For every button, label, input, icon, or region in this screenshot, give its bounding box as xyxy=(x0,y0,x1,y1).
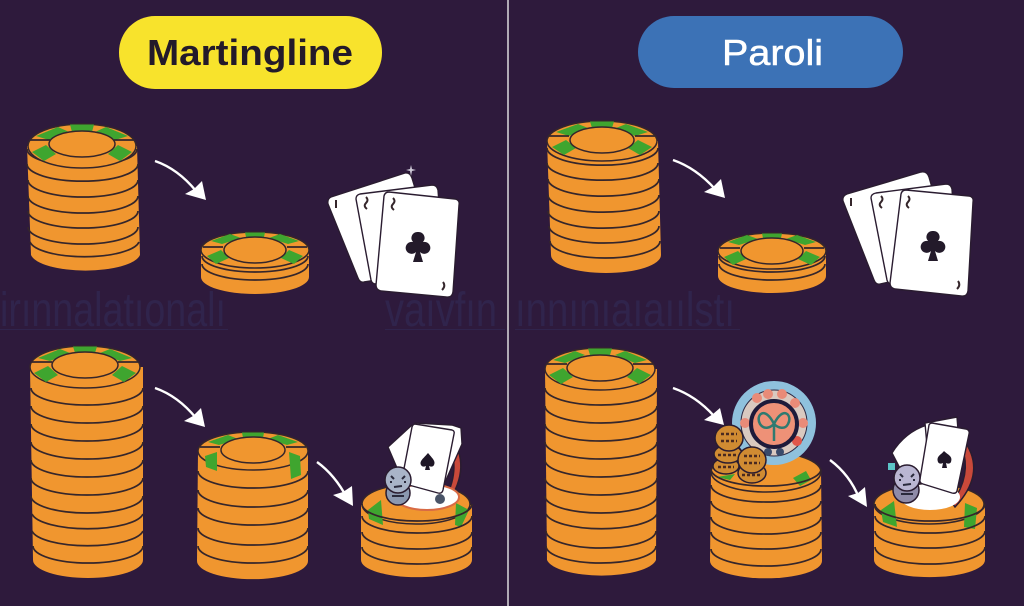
chip stack: Paroli bottom short xyxy=(874,484,985,577)
playing cards: Paroli top xyxy=(843,172,973,296)
arrow 5 xyxy=(673,388,724,425)
playing cards with chips: Paroli bottom xyxy=(888,417,974,510)
arrow 1 xyxy=(155,161,206,200)
chip stack: Martingline top small xyxy=(201,232,309,294)
arrow 6 xyxy=(830,460,867,507)
heading: Paroli xyxy=(638,16,903,88)
icon: brown chip piles xyxy=(713,425,766,483)
arrow 3 xyxy=(155,388,205,427)
heading: Paroli: Paroli xyxy=(722,32,823,73)
chip stack: Paroli top tall xyxy=(547,121,661,273)
faint background text left: irınnalatıonalı xyxy=(0,284,226,337)
chip stack: Paroli top small xyxy=(718,233,826,293)
chip stack: Martingline bottom short xyxy=(361,484,472,577)
chip stack: Paroli bottom medium xyxy=(710,452,822,578)
playing cards with chips: Martingline bottom xyxy=(385,423,462,510)
heading: Martingline: Martingline xyxy=(147,32,353,73)
icon: roulette wheel xyxy=(732,381,816,465)
faint background text right: ınnınıaıaıılstı xyxy=(515,284,735,337)
chip stack: Martingline bottom medium xyxy=(197,432,308,579)
chip stack: Paroli bottom tall xyxy=(545,348,657,576)
faint background text middle: vaıvfın xyxy=(385,284,497,337)
chip stack: Martingline top tall xyxy=(27,124,140,271)
heading: Martingline xyxy=(119,16,382,89)
chip stack: Martingline bottom tall xyxy=(30,346,143,578)
playing cards: Martingline top xyxy=(328,165,459,297)
arrow 2 xyxy=(673,160,725,198)
arrow 4 xyxy=(317,462,353,506)
